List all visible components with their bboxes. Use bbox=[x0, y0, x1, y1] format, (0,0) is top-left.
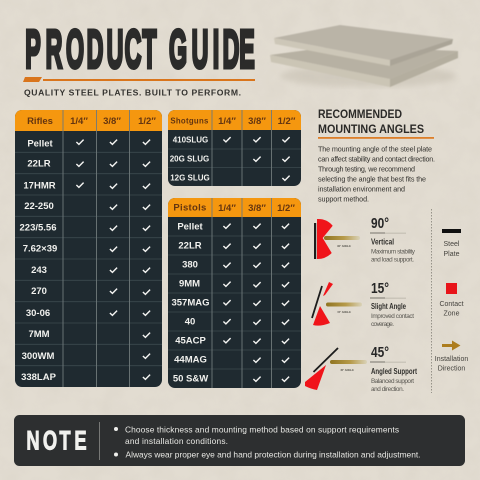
legend: steel plate: Steel bbox=[444, 241, 460, 248]
mounting angles description: installation environment and bbox=[318, 184, 405, 194]
rifles row labels: 223/5.56 bbox=[20, 222, 56, 234]
rifles row labels: 270 bbox=[31, 286, 47, 297]
angle text: 15 degrees slight angle: Improved contact bbox=[371, 313, 414, 320]
angle diagram: 90 degrees: 90° ANGLE bbox=[337, 244, 351, 248]
heading: recommended mounting angles: MOUNTING ANGLES bbox=[318, 122, 424, 136]
rifles row labels: 30-06 bbox=[26, 308, 50, 319]
pistols row labels: 40 bbox=[185, 316, 195, 328]
rifles header: 3/8″ bbox=[103, 116, 121, 127]
shotguns header: 1/4″ bbox=[218, 116, 236, 127]
title: PRODUCT GUIDE bbox=[25, 18, 255, 79]
legend: installation direction: Direction bbox=[438, 366, 465, 372]
rifles header: Rifles bbox=[27, 116, 53, 127]
shotguns header: Shotguns bbox=[170, 116, 209, 126]
note bullet one bbox=[114, 424, 399, 446]
rifles row labels: 338LAP bbox=[21, 372, 57, 383]
angle diagram: 15 degrees: 15° ANGLE bbox=[337, 310, 351, 314]
table: pistols bbox=[168, 198, 301, 388]
shotguns row labels: 20G SLUG bbox=[170, 154, 209, 164]
heading: recommended mounting angles: RECOMMENDED bbox=[318, 107, 402, 121]
pistols row labels: Pellet bbox=[177, 222, 204, 232]
tagline: QUALITY STEEL PLATES. BUILT TO PERFORM. bbox=[24, 88, 241, 98]
pistols row labels: 44MAG bbox=[174, 354, 207, 366]
angle text: 15 degrees slight angle: 15° bbox=[371, 280, 389, 297]
note bullet two: Always wear proper eye and hand protection during installation and adjustment. bbox=[126, 450, 420, 460]
pistols header: 3/8″ bbox=[248, 203, 266, 214]
angle diagram: 90 degrees bbox=[314, 219, 360, 259]
rifles check marks bbox=[76, 140, 150, 379]
angle text: 45 degrees angled support: and direction. bbox=[371, 386, 404, 393]
pistols header: Pistols bbox=[173, 202, 207, 214]
shotguns row labels: 410SLUG bbox=[173, 136, 208, 144]
angle text: 90 degrees vertical: Vertical bbox=[371, 238, 394, 246]
angle text: 45 degrees angled support: Angled Support bbox=[371, 367, 417, 376]
mounting angles description: The mounting angle of the steel plate bbox=[318, 144, 432, 154]
mounting angles description: selecting the angle that best fits the bbox=[318, 174, 426, 184]
table: shotguns bbox=[168, 110, 301, 186]
angle text: 90 degrees vertical: Maximum stability bbox=[371, 248, 416, 256]
shotguns row labels bbox=[170, 136, 210, 182]
pistols row labels: 22LR bbox=[178, 240, 202, 252]
rifles row labels: 22-250 bbox=[24, 201, 54, 212]
pistols row labels: 50 S&W bbox=[173, 374, 208, 384]
pistols row labels: 357MAG bbox=[171, 298, 210, 308]
legend: steel plate bbox=[442, 229, 461, 258]
angle text: 90 degrees vertical bbox=[370, 215, 416, 264]
angle text: 45 degrees angled support bbox=[370, 344, 417, 393]
angle diagram: 15 degrees bbox=[312, 282, 362, 326]
rifles row labels: Pellet bbox=[27, 138, 54, 150]
rifles header: 1/2″ bbox=[138, 116, 156, 127]
rifles header: 1/4″ bbox=[70, 116, 88, 127]
mounting angles description: can affect stability and contact direction. bbox=[318, 154, 435, 164]
shotguns header: 1/2″ bbox=[278, 116, 296, 127]
angle diagram: 45 degrees bbox=[305, 348, 367, 390]
note bullet one: and installation conditions. bbox=[125, 436, 228, 446]
legend: installation direction bbox=[435, 340, 468, 372]
pistols check marks bbox=[223, 224, 289, 381]
pistols row labels: 380 bbox=[182, 260, 198, 270]
mounting angles description: support method. bbox=[318, 194, 369, 204]
mounting angles description bbox=[318, 144, 435, 204]
pistols row labels bbox=[171, 222, 210, 384]
table: rifles bbox=[15, 110, 162, 387]
pistols row labels: 9MM bbox=[179, 278, 200, 290]
rifles row labels: 7MM bbox=[28, 329, 50, 340]
rifles row labels: 300WM bbox=[22, 351, 54, 362]
angle text: 45 degrees angled support: Balanced support bbox=[371, 378, 414, 385]
note panel bbox=[14, 415, 465, 466]
angle text: 15 degrees slight angle: coverage. bbox=[371, 321, 394, 328]
rifles row labels: 7.62×39 bbox=[23, 244, 57, 254]
title underline bbox=[23, 77, 255, 82]
rifles row labels: 22LR bbox=[27, 158, 51, 170]
shotguns row labels: 12G SLUG bbox=[170, 174, 210, 182]
angle text: 45 degrees angled support: 45° bbox=[371, 344, 389, 361]
angle text: 15 degrees slight angle bbox=[370, 280, 414, 328]
angle text: 15 degrees slight angle: Slight Angle bbox=[371, 302, 406, 311]
rifles row labels bbox=[20, 138, 57, 383]
legend: contact zone: Contact bbox=[439, 301, 464, 308]
legend: contact zone: Zone bbox=[444, 310, 460, 318]
note label: NOTE bbox=[26, 425, 87, 455]
pistols header bbox=[168, 198, 301, 217]
angle diagram: 45 degrees: 45° ANGLE bbox=[340, 368, 354, 372]
shotguns header bbox=[168, 110, 301, 130]
mounting angles description: Through testing, we recommend bbox=[318, 164, 415, 174]
angle text: 90 degrees vertical: and load support. bbox=[371, 256, 414, 264]
rifles header bbox=[15, 110, 162, 131]
pistols row labels: 45ACP bbox=[175, 336, 206, 346]
legend: contact zone bbox=[439, 283, 464, 318]
rifles row labels: 243 bbox=[31, 265, 47, 276]
heading: recommended mounting angles bbox=[318, 107, 434, 139]
image: stacked steel plates bbox=[270, 25, 458, 87]
rifles row labels: 17HMR bbox=[23, 180, 56, 192]
pistols header: 1/2″ bbox=[277, 203, 295, 214]
note bullet one: Choose thickness and mounting method based on support requirements bbox=[125, 424, 399, 434]
shotguns check marks bbox=[223, 137, 290, 180]
legend: steel plate: Plate bbox=[444, 251, 460, 258]
angle text: 90 degrees vertical: 90° bbox=[371, 215, 389, 232]
pistols header: 1/4″ bbox=[218, 203, 236, 214]
legend: installation direction: Installation bbox=[435, 356, 468, 363]
shotguns header: 3/8″ bbox=[248, 116, 266, 127]
